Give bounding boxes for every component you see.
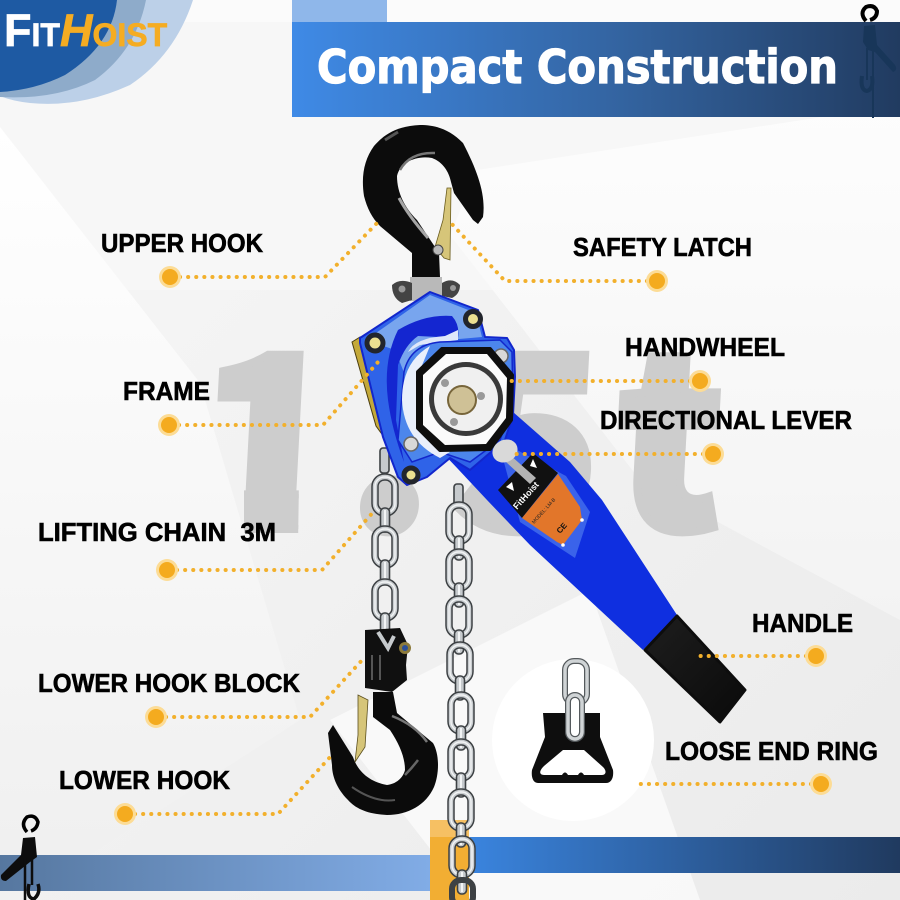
logo swoosh (0, 0, 193, 104)
orange accent (430, 820, 469, 900)
icon: top-right hoist silhouette (862, 6, 896, 118)
label: handwheel (505, 332, 785, 392)
header accent (292, 0, 387, 22)
lower hook block (365, 628, 411, 692)
icon: bottom-left hoist silhouette (1, 816, 39, 900)
handle (440, 412, 677, 650)
frame (360, 292, 515, 485)
label: safety latch (450, 222, 752, 292)
background text: 1.5t: 1.5t (187, 251, 733, 599)
label: directional lever: DIRECTIONAL LEVER (600, 405, 852, 435)
label plate: FitHoist (511, 480, 541, 511)
label: lifting chain: LIFTING CHAIN 3M (38, 517, 276, 547)
label: frame (123, 362, 378, 436)
title: Compact Construction (317, 40, 838, 94)
lower hook latch (355, 695, 368, 762)
directional lever (488, 435, 536, 484)
label: handle (696, 608, 853, 667)
bottom right bar (470, 837, 900, 873)
label plate: MODEL: LM-B (531, 497, 558, 525)
label: loose end ring: LOOSE END RING (665, 736, 878, 766)
label: upper hook: UPPER HOOK (101, 228, 263, 258)
label: upper hook (101, 222, 378, 288)
lifting chain, hand side (449, 484, 473, 900)
upper hook (363, 125, 484, 277)
label: lower hook: LOWER HOOK (59, 765, 230, 795)
safety latch (433, 188, 451, 260)
label: lower hook (59, 755, 332, 825)
label: directional lever (515, 405, 852, 465)
label: frame: FRAME (123, 376, 210, 406)
label plate: CE (555, 521, 569, 535)
label: lower hook block: LOWER HOOK BLOCK (38, 668, 300, 698)
handwheel (418, 349, 512, 450)
header banner (292, 22, 900, 117)
swivel bracket (392, 277, 460, 303)
bottom left bar (0, 855, 430, 891)
hand grip (645, 616, 745, 722)
label: loose end ring (640, 736, 878, 795)
label: handle: HANDLE (752, 608, 853, 638)
frame back plate (352, 337, 384, 437)
label: safety latch: SAFETY LATCH (573, 232, 752, 262)
logo text: FITHOIST (4, 5, 168, 56)
label plate (498, 453, 584, 547)
lifting chain, load side (375, 448, 395, 637)
lower hook (328, 692, 438, 815)
label: lower hook block (38, 658, 364, 728)
label: lifting chain (38, 510, 375, 581)
label: handwheel: HANDWHEEL (625, 332, 785, 362)
loose end ring (532, 661, 613, 783)
white circle inset (492, 659, 654, 821)
